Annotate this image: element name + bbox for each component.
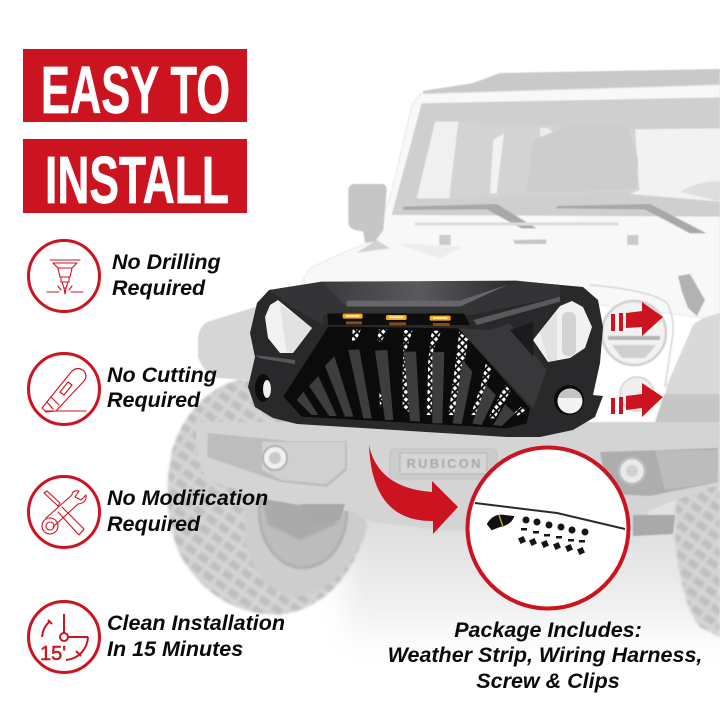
heading: install (23, 139, 247, 218)
upper band facets (269, 281, 560, 325)
amber LED lights (343, 314, 451, 326)
text: no cutting: No Cutting (107, 363, 217, 387)
text: no cutting: Required (107, 388, 201, 412)
heading: easy to: EASY TO (41, 53, 230, 128)
right tire (675, 470, 720, 637)
left fog light (263, 446, 287, 470)
mesh strips (352, 329, 527, 418)
right headlight (602, 301, 666, 365)
ground shadow (345, 495, 720, 655)
text: clean installation: In 15 Minutes (107, 637, 243, 661)
bumper plate (390, 449, 497, 479)
right inner fender (660, 313, 720, 430)
clips (518, 516, 588, 555)
windshield (348, 97, 720, 258)
bumper plate: RUBICON (406, 456, 480, 471)
top panel (322, 281, 517, 307)
vehicle body and hood (300, 85, 720, 320)
heading: install: INSTALL (45, 143, 229, 218)
text: package includes: Screw & Clips (476, 669, 620, 693)
hood latch (678, 274, 705, 316)
wiring harness (488, 515, 513, 529)
vehicle roof (423, 69, 720, 98)
red arrow: upper (611, 302, 663, 336)
package circle (468, 448, 628, 608)
icon: drill (28, 240, 100, 312)
text: no drilling: Required (112, 276, 206, 300)
right eye opening (533, 301, 592, 362)
right fog opening (554, 385, 584, 415)
text: no modification: No Modification (107, 486, 268, 510)
left fender (198, 305, 262, 400)
text: clean installation: Clean Installation (107, 611, 285, 635)
grille (248, 281, 603, 437)
left eye opening (265, 300, 312, 353)
vehicle photo, greyed (168, 69, 720, 637)
text: no drilling: No Drilling (112, 250, 221, 274)
fender line (590, 285, 673, 387)
icon: 15 minute clock (28, 602, 100, 672)
grille fins (297, 349, 515, 426)
icon: 15 minute clock: 15' (40, 643, 66, 665)
heading: easy to (23, 49, 247, 128)
curved red arrow (369, 445, 458, 534)
icon: utility knife (28, 354, 100, 424)
text: package includes: Package Includes: (454, 618, 642, 642)
icon: crossed tools (28, 476, 100, 548)
text: no modification: Required (107, 512, 201, 536)
grille body (248, 281, 603, 437)
bumper recess left (207, 433, 347, 487)
bumper (196, 422, 720, 530)
red arrow: lower (611, 383, 663, 417)
suspension (633, 515, 675, 536)
lower right lamp (620, 377, 654, 411)
text: package includes: Weather Strip, Wiring Harness, (388, 643, 702, 667)
bumper recess right (600, 448, 718, 496)
left fog opening (255, 374, 271, 402)
grille opening (283, 327, 530, 428)
right fog light (619, 458, 645, 484)
LED bar (327, 313, 470, 325)
left tire (168, 380, 372, 615)
weather strip (475, 503, 625, 529)
